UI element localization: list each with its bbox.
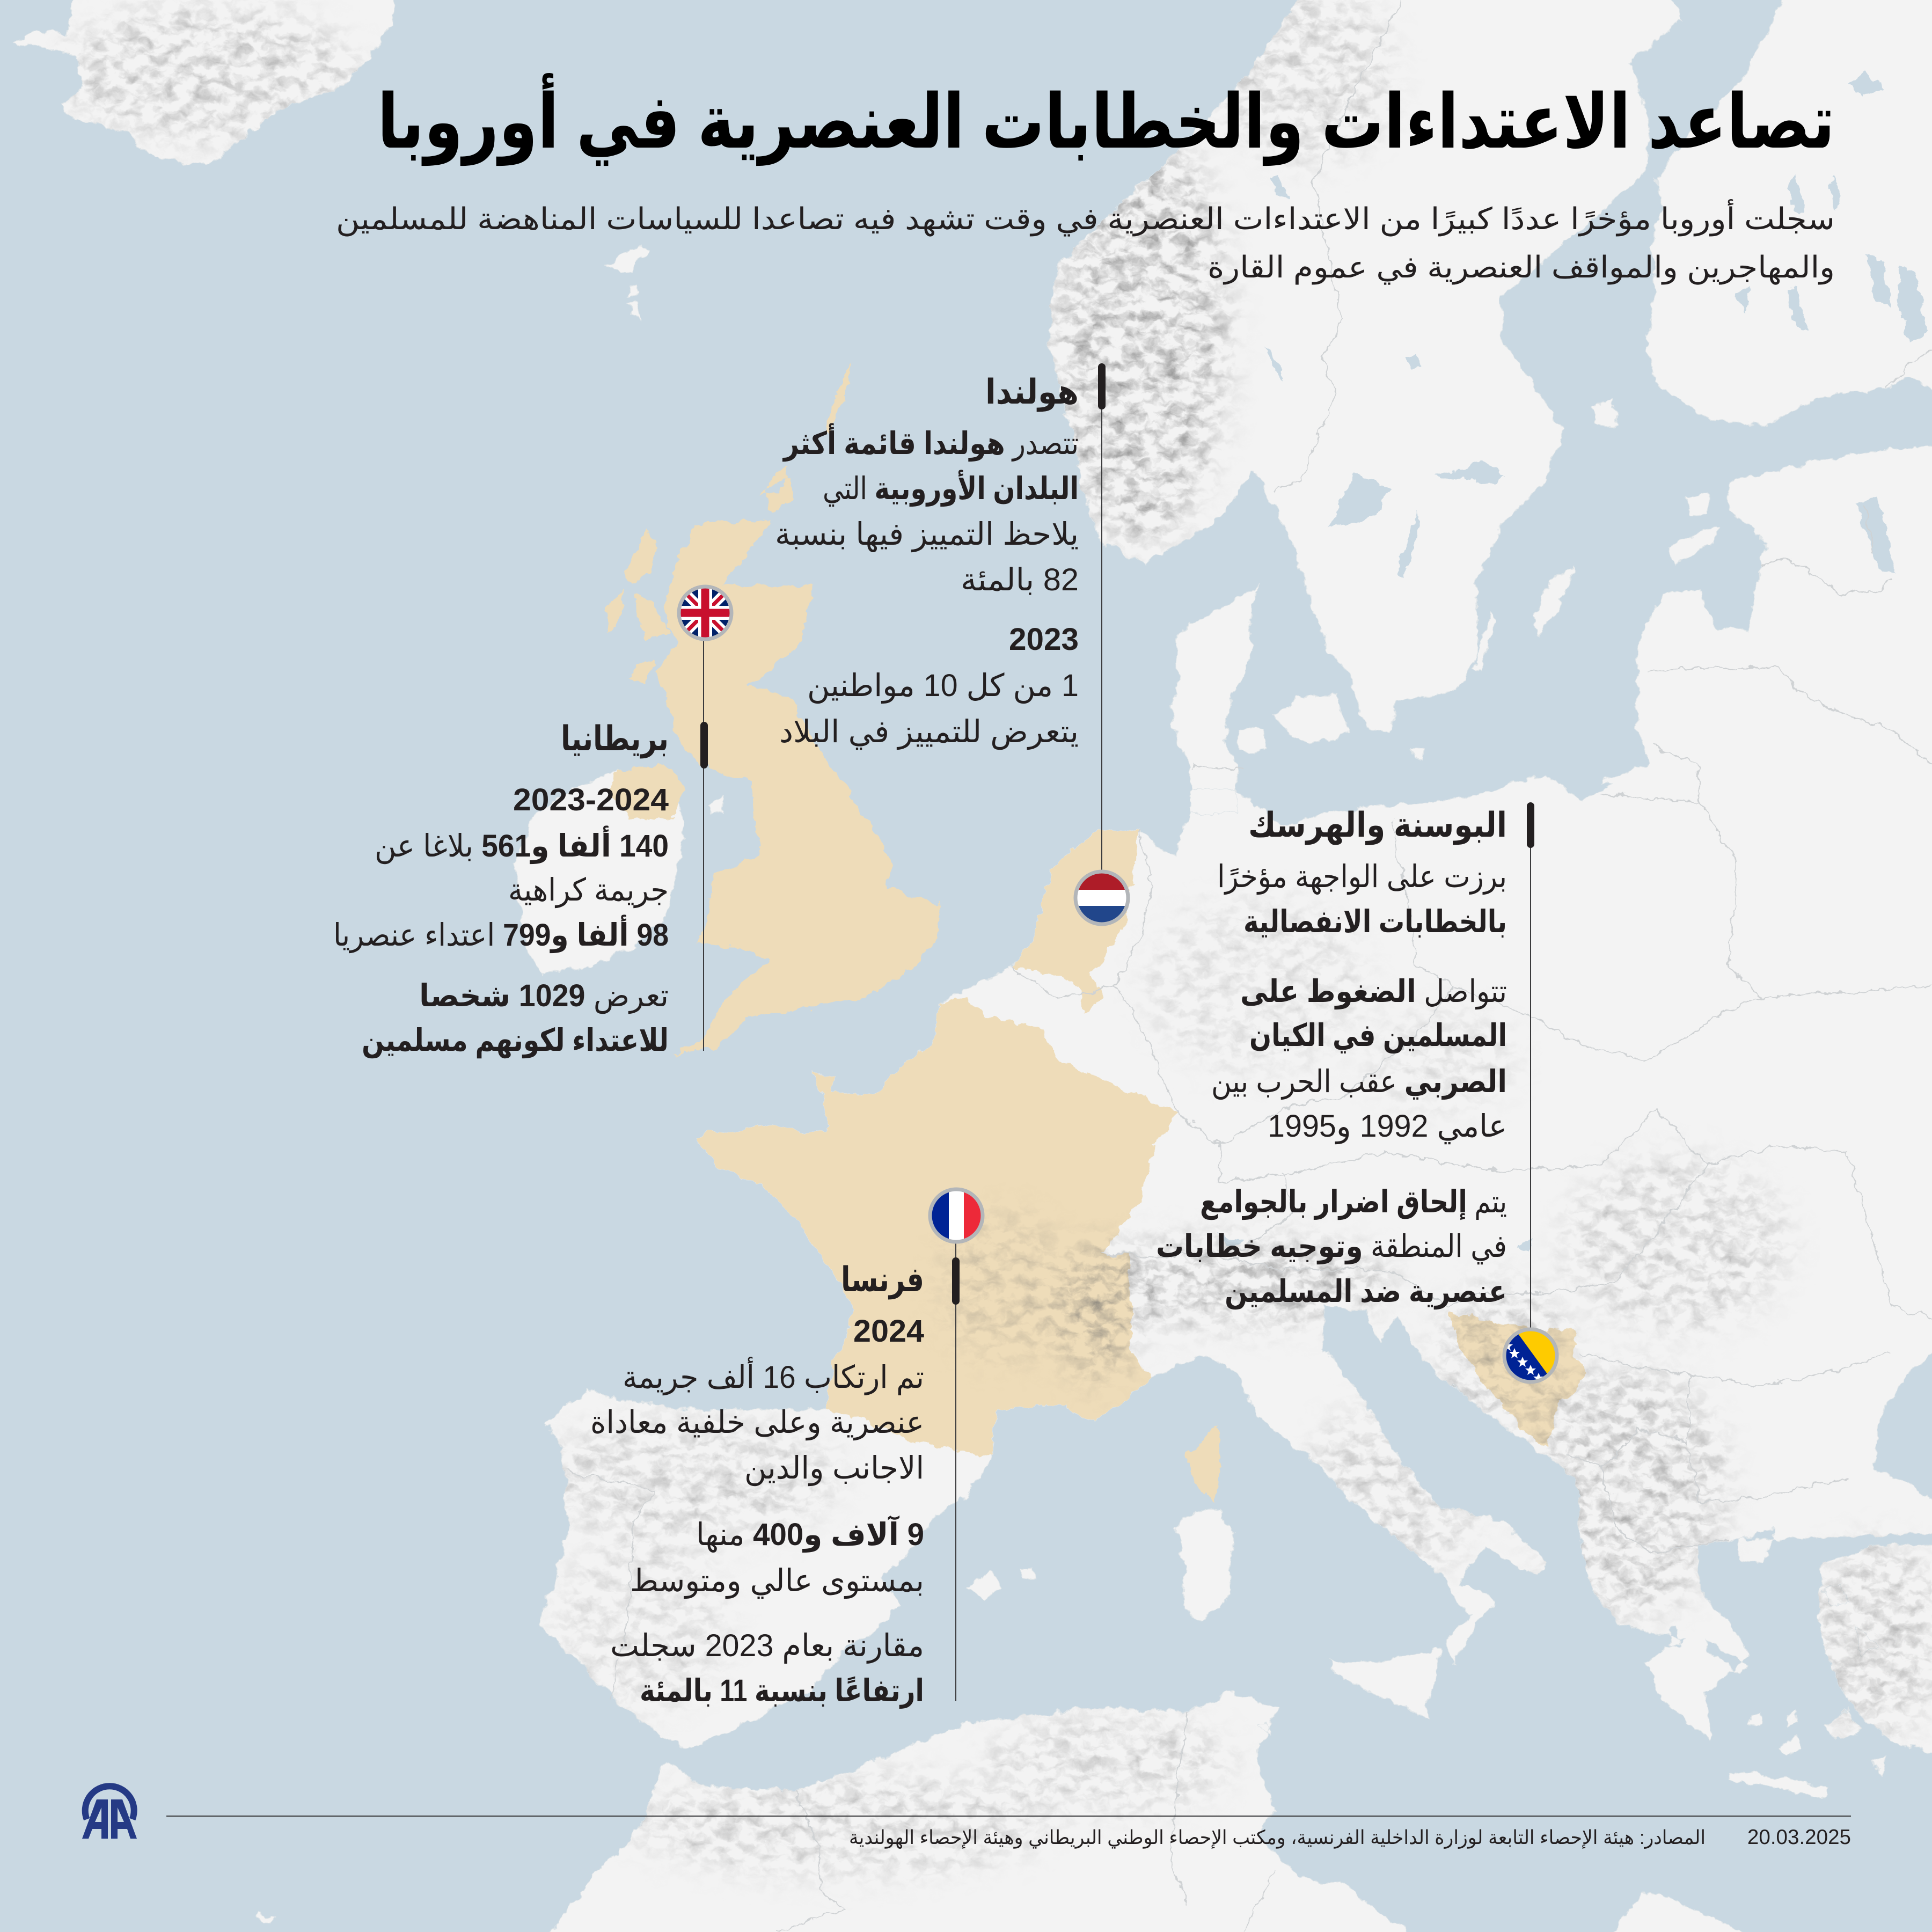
text block: France: 2024 xyxy=(853,1314,924,1349)
text block: United Kingdom xyxy=(333,719,669,1059)
heading: France: فرنسا xyxy=(841,1260,924,1300)
footer: sources: المصادر: هيئة الإحصاء التابعة لوزارة الداخلية الفرنسية، ومكتب الإحصاء الوطني البريطاني وهيئة الإحصاء الهولندية xyxy=(849,1826,1706,1849)
text block: Bosnia and Herzegovina: الصربي عقب الحرب بين xyxy=(1211,1064,1507,1100)
footer: date: 20.03.2025 xyxy=(1747,1826,1851,1849)
text block: Bosnia and Herzegovina: المسلمين في الكيان xyxy=(1249,1018,1507,1054)
text block: Netherlands: 1 من كل 10 مواطنين xyxy=(807,668,1079,704)
text block: Bosnia and Herzegovina: يتم إلحاق اضرار بالجوامع xyxy=(1200,1184,1507,1220)
text block: Bosnia and Herzegovina: في المنطقة وتوجيه خطابات xyxy=(1156,1229,1507,1265)
logo: Anadolu Agency xyxy=(82,1786,137,1839)
Corsica xyxy=(1188,1424,1221,1502)
highlighted countries xyxy=(606,363,1585,1502)
text block: Netherlands: يتعرض للتمييز في البلاد xyxy=(779,714,1079,750)
text block: France: عنصرية وعلى خلفية معاداة xyxy=(590,1405,924,1441)
text block: Bosnia and Herzegovina: عنصرية ضد المسلمين xyxy=(1225,1274,1507,1310)
text block: Bosnia and Herzegovina: بالخطابات الانفصالية xyxy=(1243,904,1507,939)
heading: United Kingdom: بريطانيا xyxy=(561,719,669,759)
text block: Bosnia and Herzegovina xyxy=(1156,806,1507,1310)
Netherlands xyxy=(1011,828,1140,1013)
text block: United Kingdom: للاعتداء لكونهم مسلمين xyxy=(362,1023,669,1059)
subtitle xyxy=(336,199,1835,285)
text block: France xyxy=(590,1260,924,1709)
text block: United Kingdom: جريمة كراهية xyxy=(508,873,669,909)
text block: Netherlands: تتصدر هولندا قائمة أكثر xyxy=(782,423,1079,462)
text block: France: تم ارتكاب 16 ألف جريمة xyxy=(623,1357,924,1396)
text block: Netherlands xyxy=(775,372,1079,750)
country borders xyxy=(567,0,1932,1932)
subtitle: سجلت أوروبا مؤخرًا عددًا كبيرًا من الاعتداءات العنصرية في وقت تشهد فيه تصاعدا للسياسات المناهضة للمسلمين xyxy=(336,199,1835,237)
footer rule xyxy=(166,1816,1851,1817)
text block: France: الاجانب والدين xyxy=(744,1451,924,1487)
leader line: France xyxy=(952,1242,960,1701)
leader line: Netherlands xyxy=(1098,363,1106,873)
flag: United Kingdom xyxy=(678,586,732,640)
flag: Netherlands xyxy=(1075,871,1129,925)
text block: United Kingdom: 140 ألفا و561 بلاغا عن xyxy=(375,825,669,865)
subtitle: والمهاجرين والمواقف العنصرية في عموم القارة xyxy=(1208,250,1835,285)
text block: United Kingdom: تعرض 1029 شخصا xyxy=(419,978,669,1014)
text block: Netherlands: البلدان الأوروبية التي xyxy=(823,470,1079,507)
text block: Bosnia and Herzegovina: برزت على الواجهة مؤخرًا xyxy=(1217,859,1507,895)
text block: United Kingdom: 98 ألفا و799 اعتداء عنصريا xyxy=(333,914,669,954)
France xyxy=(696,997,1177,1455)
text block: United Kingdom: 2023-2024 xyxy=(513,782,669,817)
lakes xyxy=(1216,74,1927,1252)
text block: France: ارتفاعًا بنسبة 11 بالمئة xyxy=(640,1673,924,1709)
Bosnia and Herzegovina xyxy=(1448,1312,1585,1446)
leader line: Bosnia xyxy=(1527,802,1534,1331)
leader line: United Kingdom xyxy=(700,639,708,1051)
heading: Bosnia and Herzegovina: البوسنة والهرسك xyxy=(1248,806,1507,845)
text block: France: بمستوى عالي ومتوسط xyxy=(630,1563,924,1599)
flag: Bosnia and Herzegovina xyxy=(1502,1329,1557,1388)
flag: France xyxy=(930,1189,983,1242)
text block: Netherlands: 2023 xyxy=(1009,622,1079,657)
text block: Netherlands: يلاحظ التمييز فيها بنسبة xyxy=(775,517,1079,553)
text block: Netherlands: 82 بالمئة xyxy=(961,562,1079,597)
United Kingdom xyxy=(606,363,942,1055)
text block: Bosnia and Herzegovina: تتواصل الضغوط على xyxy=(1240,974,1507,1010)
heading: Netherlands: هولندا xyxy=(985,372,1079,412)
text block: France: 9 آلاف و400 منها xyxy=(696,1515,924,1553)
text block: Bosnia and Herzegovina: عامي 1992 و1995 xyxy=(1268,1109,1507,1145)
text block: France: مقارنة بعام 2023 سجلت xyxy=(610,1628,924,1664)
